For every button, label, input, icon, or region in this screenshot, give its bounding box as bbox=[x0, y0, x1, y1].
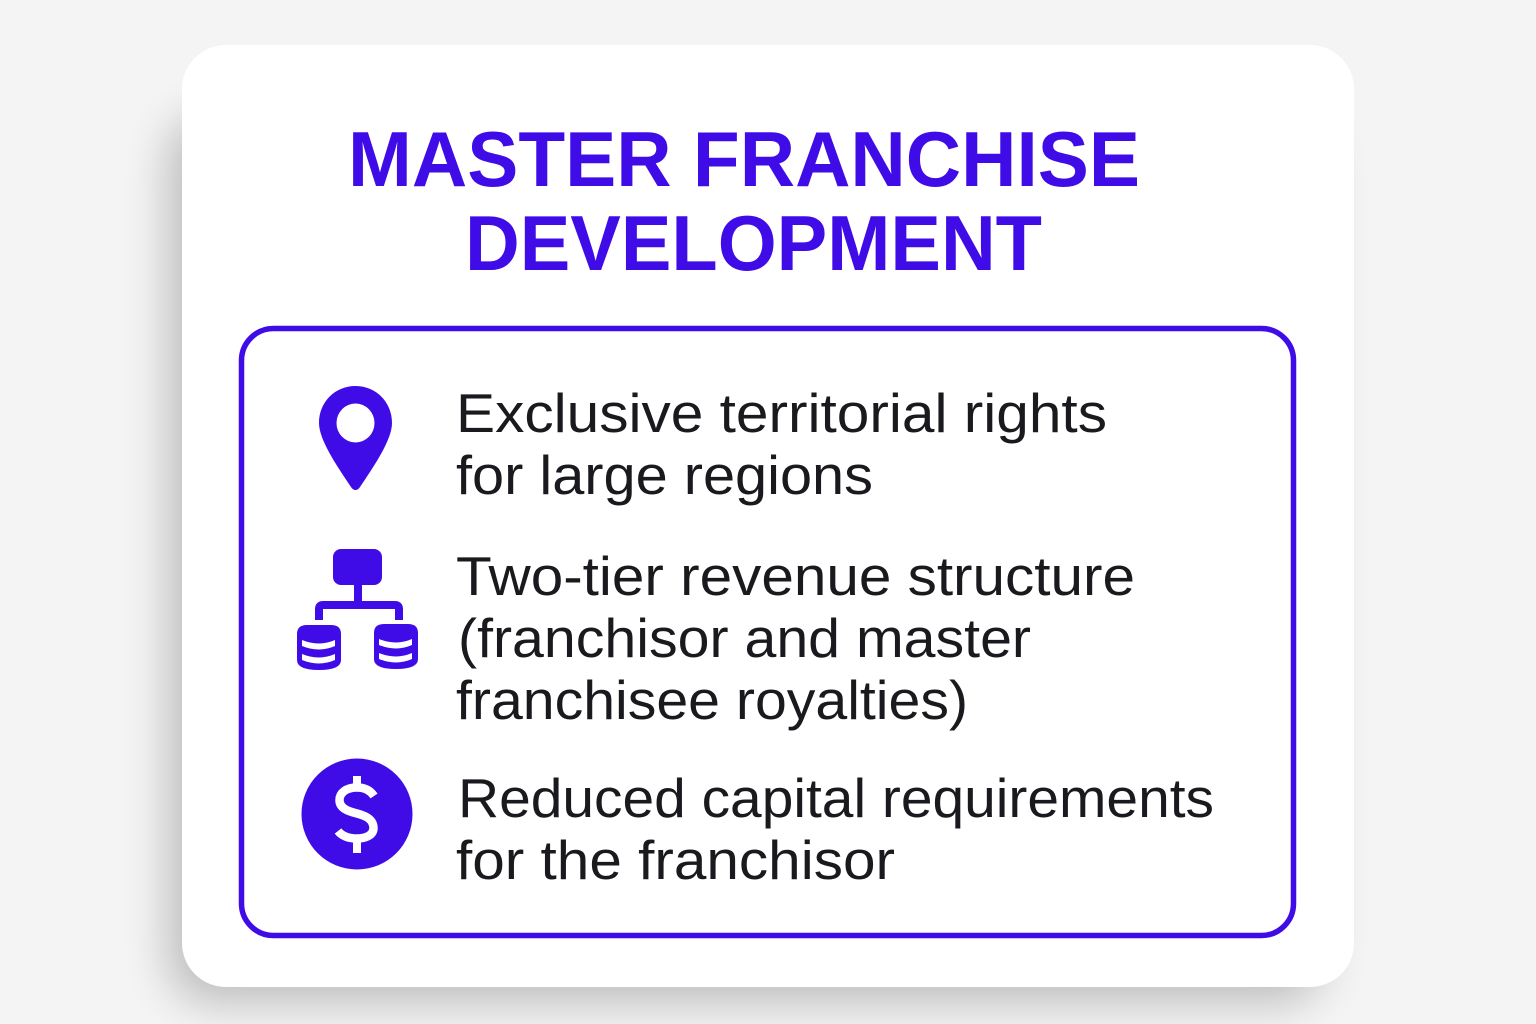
text: exclusive territorial rights bbox=[456, 382, 1107, 506]
text: two-tier revenue structure: Two-tier revenue structure bbox=[456, 545, 1135, 607]
title: DEVELOPMENT bbox=[465, 199, 1042, 287]
text: reduced capital requirements: Reduced capital requirements bbox=[458, 767, 1214, 829]
panel: white card bbox=[182, 45, 1354, 987]
text: reduced capital requirements: for the franchisor bbox=[456, 829, 895, 891]
text: exclusive territorial rights: Exclusive territorial rights bbox=[456, 382, 1107, 444]
title bbox=[348, 115, 1140, 287]
icon: dollar coin bbox=[302, 758, 412, 870]
card shadow bbox=[168, 115, 1324, 1003]
text: two-tier revenue structure: franchisee royalties) bbox=[456, 669, 968, 731]
text: exclusive territorial rights: for large regions bbox=[456, 444, 873, 506]
icon: hierarchy network with databases bbox=[297, 549, 418, 670]
panel: benefits box bbox=[242, 328, 1294, 936]
text: two-tier revenue structure: (franchisor and master bbox=[458, 607, 1031, 669]
text: reduced capital requirements bbox=[456, 767, 1214, 891]
icon: location pin bbox=[319, 386, 392, 490]
title: MASTER FRANCHISE bbox=[348, 115, 1140, 203]
text: two-tier revenue structure bbox=[456, 545, 1135, 731]
